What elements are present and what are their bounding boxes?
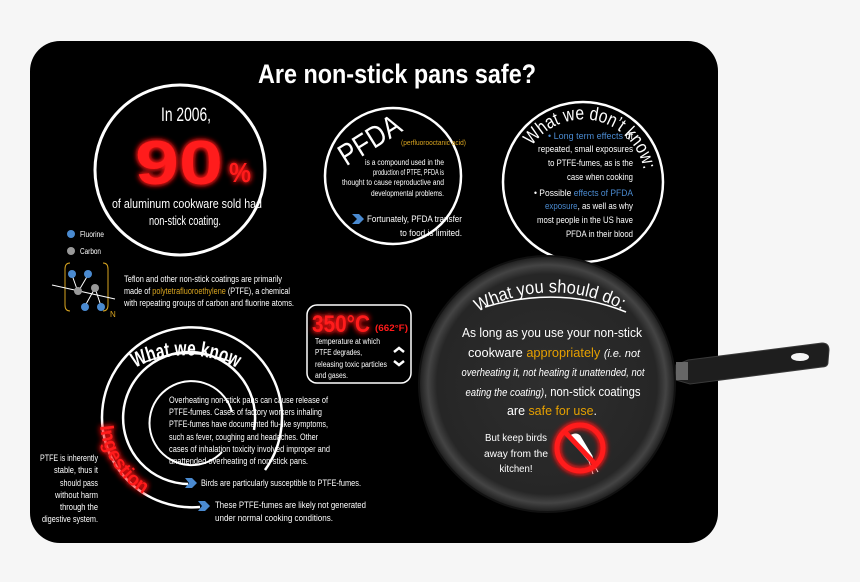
panel: PFDA circle: (perfluorooctanic acid) (401, 138, 466, 147)
panel: What we don't know: exposure, as well as why (545, 201, 644, 212)
panel: 350C: releasing toxic particles (315, 360, 387, 369)
legend: fluorine carbon: Carbon (80, 247, 101, 256)
pan: what you should do: kitchen! (500, 464, 532, 475)
panel: What we don't know: case when cooking (567, 172, 633, 183)
text: ingestion detail: stable, thus it (54, 465, 98, 475)
text: not generated: These PTFE-fumes are likely not generated (215, 500, 366, 510)
text: Teflon description: Teflon and other non-stick coatings are primarily (124, 274, 282, 284)
panel: 90 percent circle: non-stick coating. (149, 213, 221, 228)
pan: what you should do: As long as you use your non-stick (462, 325, 642, 340)
panel: What we don't know: PFDA in their blood (566, 229, 633, 240)
panel: PFDA circle: developmental problems. (371, 189, 444, 198)
panel: 90 percent circle: % (229, 157, 251, 188)
text: ingestion detail: PTFE is inherently (40, 453, 98, 463)
text: ingestion detail: digestive system. (42, 514, 98, 524)
panel: 350C: PTFE degrades, (315, 348, 362, 357)
text: overheating: such as fever, coughing and headaches. Other (169, 432, 318, 442)
text: overheating: PTFE-fumes. Cases of factory workers inhaling (169, 407, 322, 417)
pan: what you should do: are safe for use. (507, 403, 597, 418)
panel: 90 percent circle: of aluminum cookware sold had (112, 196, 262, 211)
text: overheating: Overheating non-stick pans can cause release of (169, 395, 328, 405)
panel: 350C: Temperature at which (315, 337, 380, 346)
text: ingestion detail: without harm (54, 490, 98, 500)
panel: What we don't know: to PTFE-fumes, as is the (548, 158, 633, 169)
panel: 90 percent circle: In 2006, (161, 105, 211, 126)
pan: what you should do: But keep birds (485, 433, 547, 444)
panel: What we don't know: repeated, small exposures (538, 144, 633, 155)
panel: PFDA circle (325, 108, 466, 244)
icon: PTFE molecule (52, 263, 116, 319)
icon: PTFE molecule: N (110, 310, 116, 319)
pan: what you should do: cookware appropriately (i.e. not (468, 345, 641, 360)
pan: what you should do: eating the coating), non-stick coatings (466, 384, 655, 399)
icon: no birds (557, 425, 603, 474)
panel: What we don't know: • Long term effects of (548, 131, 634, 142)
text: overheating: unattended overheating of non-stick pans. (169, 456, 308, 466)
text: not generated (198, 500, 366, 523)
panel: PFDA circle: production of PTFE, PFDA is (373, 168, 444, 177)
icon: chevron (352, 214, 364, 224)
text: overheating: cases of inhalation toxicity involved improper and (169, 444, 330, 454)
text: overheating: PTFE-fumes have documented flu-like symptoms, (169, 419, 328, 429)
legend: fluorine carbon: Fluorine (80, 230, 104, 239)
panel: what we know rings: What we know (129, 341, 242, 367)
panel: What we don't know: What we don’t know: (522, 107, 654, 168)
panel: PFDA circle: thought to cause reproductive and (342, 178, 444, 187)
text: Teflon description: with repeating groups of carbon and fluorine atoms. (123, 298, 294, 308)
panel: PFDA circle: is a compound used in the (365, 158, 444, 167)
pan: what you should do (418, 255, 830, 513)
pan: what you should do: What you should do: (472, 279, 625, 310)
panel: what we know rings (96, 326, 284, 509)
text: birds susceptible: Birds are particularly susceptible to PTFE-fumes. (201, 478, 361, 488)
panel: PFDA circle: Fortunately, PFDA transfer (367, 214, 462, 225)
panel: PFDA circle: PFDA (332, 108, 408, 172)
panel: 350C: and gases. (315, 371, 348, 380)
pan: what you should do: overheating it, not heating it unattended, not (462, 367, 645, 379)
panel: What we don't know (502, 100, 664, 263)
panel: PFDA circle: to food is limited. (400, 228, 462, 239)
panel: 90 percent circle (95, 85, 265, 255)
panel: what we know rings: Ingestion (96, 420, 152, 498)
panel: 90 percent circle: 90 (135, 129, 223, 198)
panel: What we don't know: most people in the US have (537, 215, 633, 226)
panel: 350C: (662°F) (375, 323, 408, 333)
title: Are non-stick pans safe? (258, 59, 536, 89)
text: ingestion detail: through the (60, 502, 98, 512)
panel: What we don't know: • Possible effects of PFDA (534, 188, 640, 199)
text: not generated: under normal cooking conditions. (215, 513, 333, 523)
legend: fluorine carbon (67, 230, 104, 256)
panel: 350C: 350°C (312, 311, 370, 338)
background card (30, 41, 718, 543)
text: ingestion detail: should pass (60, 478, 98, 488)
panel: 350C (307, 305, 411, 383)
text: Teflon description: made of polytetrafluoroethylene (PTFE), a chemical (124, 286, 305, 296)
pan: what you should do: away from the (484, 449, 548, 460)
